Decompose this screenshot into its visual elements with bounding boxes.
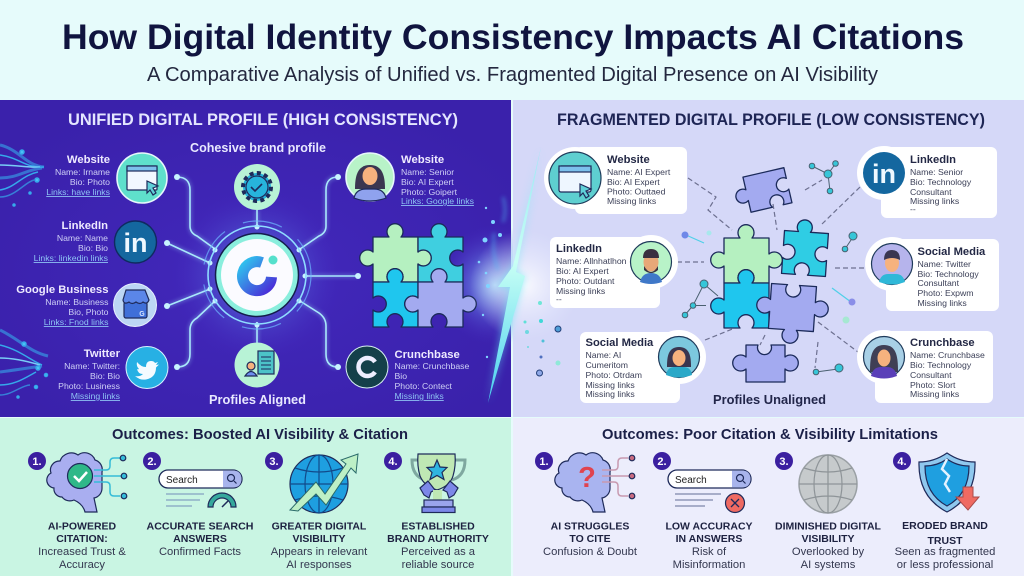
piece: bottom lavender: [733, 345, 798, 382]
card: linkedin right: Consultant: [910, 187, 952, 197]
heading: poor outcomes: Outcomes: Poor Citation & Visibility Limitations: [602, 426, 938, 443]
outcome 3: diminished: Overlooked by: [792, 546, 864, 558]
outcome 4: authority: BRAND AUTHORITY: [387, 533, 489, 545]
outcome 2: low accuracy: Risk of: [692, 546, 727, 558]
card: linkedin: [550, 235, 678, 308]
card: linkedin right: Name: Senior: [910, 167, 963, 177]
piece: top lavender: [732, 168, 792, 215]
outcome 3: visibility: VISIBILITY: [292, 533, 346, 545]
outcome 4: authority: ESTABLISHED: [401, 520, 475, 532]
profile: website: Name: Irname: [55, 167, 110, 177]
profile: person website: Website: [401, 154, 444, 166]
profile: person website: Links: Google links: [401, 196, 475, 206]
dashed links between cards and pieces: [677, 178, 870, 352]
outcome 4: eroded trust: or less professional: [897, 559, 993, 571]
label: profiles unaligned: Profiles Unaligned: [713, 393, 826, 407]
label: profiles aligned: Profiles Aligned: [209, 393, 306, 407]
connector lines to hub: [164, 174, 361, 370]
label: cohesive brand profile: Cohesive brand profile: [190, 141, 326, 155]
profile: linkedin: in: [124, 228, 148, 258]
outcome 1: citation: CITATION:: [56, 533, 108, 545]
icon: gear badge: [234, 164, 280, 210]
outcome 2: low accuracy: Misinformation: [673, 559, 745, 571]
card: crunchbase: Crunchbase: [910, 337, 975, 349]
assembled puzzle: [360, 224, 476, 327]
heading: unified: UNIFIED DIGITAL PROFILE (HIGH CONSISTENCY): [68, 110, 458, 129]
outcome 2: search: ACCURATE SEARCH: [146, 520, 254, 532]
outcome 3: diminished: VISIBILITY: [801, 533, 855, 545]
heading: fragmented: FRAGMENTED DIGITAL PROFILE (LOW CONSISTENCY): [557, 110, 985, 129]
card: linkedin right: --: [910, 204, 916, 214]
outcome 3: visibility: 3.: [269, 456, 279, 468]
outcome 1: citation: Increased Trust &: [38, 546, 126, 558]
profile: linkedin: LinkedIn: [62, 220, 108, 232]
card: website: Missing links: [607, 196, 657, 206]
lightning divider: [478, 147, 541, 403]
piece: cyan: [711, 270, 769, 328]
outcome 1: struggles: ?: [578, 462, 596, 494]
outcome 4: eroded trust: TRUST: [928, 535, 963, 547]
card: social media right: Name: Twitter: [918, 259, 971, 269]
outcome 4: eroded trust: [893, 452, 995, 571]
outcome 4: authority: 4.: [388, 456, 398, 468]
outcome 4: authority: Perceived as a: [401, 546, 476, 558]
profile: google business: [16, 284, 156, 327]
profile: linkedin: [34, 220, 156, 263]
card: social media right: [865, 237, 999, 311]
card: social media right: Missing links: [918, 298, 967, 308]
outcome 3: visibility: GREATER DIGITAL: [272, 520, 367, 532]
card: social media left: Social Media: [586, 337, 654, 349]
card: website: Photo: Outtaed: [607, 186, 666, 196]
outcome 1: citation: [28, 452, 127, 571]
card: linkedin: Bio: AI Expert: [556, 266, 609, 276]
scattered puzzle pieces: [711, 168, 830, 382]
outcome 1: struggles: [535, 452, 638, 558]
profile: twitter: Bio: Bio: [90, 371, 120, 381]
card: linkedin right: LinkedIn: [910, 154, 956, 166]
title: How Digital Identity Consistency Impacts AI Citations: [62, 18, 964, 57]
card: website: Bio: AI Expert: [607, 177, 660, 187]
outcome 4: eroded trust: Seen as fragmented: [895, 546, 995, 558]
profile: crunchbase: Missing links: [394, 391, 444, 401]
network nodes: [682, 161, 857, 375]
piece: lavender middle: [754, 283, 830, 346]
outcome 3: visibility: Appears in relevant: [271, 546, 368, 558]
panel: unified digital profile: [0, 100, 555, 417]
outcome 2: search: 2.: [147, 456, 157, 468]
card: social media right: Photo: Expwm: [918, 288, 974, 298]
outcome 2: low accuracy: Search: [675, 475, 707, 486]
panel: boosted outcomes: [0, 418, 511, 576]
outcome 3: diminished: [775, 452, 882, 571]
outcome 3: diminished: DIMINISHED DIGITAL: [775, 520, 882, 532]
profile: crunchbase: Crunchbase: [394, 349, 460, 361]
profile: person website: Name: Senior: [401, 167, 454, 177]
panel: fragmented digital profile: [470, 100, 1024, 417]
outcome 2: search: Search: [166, 475, 198, 486]
outcome 4: authority: reliable source: [402, 559, 474, 571]
outcome 1: citation: AI-POWERED: [48, 520, 117, 532]
outcome 3: visibility: [265, 452, 368, 571]
outcome 3: visibility: AI responses: [286, 559, 352, 571]
card: crunchbase: Name: Crunchbase: [910, 350, 985, 360]
outcome 3: diminished: 3.: [779, 456, 789, 468]
profile: crunchbase: Name: Crunchbase: [394, 361, 470, 371]
profile: google business: G: [139, 311, 145, 318]
subtitle: A Comparative Analysis of Unified vs. Fragmented Digital Presence on AI Visibility: [147, 64, 878, 86]
card: crunchbase: Missing links: [910, 389, 960, 399]
outcome 4: eroded trust: ERODED BRAND: [902, 520, 988, 532]
panel: poor outcomes: [513, 418, 1024, 576]
profile: person website: Photo: Goipert: [401, 187, 458, 197]
profile: twitter: Missing links: [71, 391, 121, 401]
card: linkedin: --: [556, 294, 562, 304]
outcome 2: low accuracy: IN ANSWERS: [676, 533, 742, 545]
outcome 2: search: ANSWERS: [173, 533, 227, 545]
card: linkedin: LinkedIn: [556, 243, 602, 255]
profile: twitter: Twitter: [84, 348, 121, 360]
card: social media right: Social Media: [918, 246, 986, 258]
card: social media left: Missing links: [586, 380, 635, 390]
outcome 2: low accuracy: [653, 452, 753, 571]
card: crunchbase: Consultant: [910, 370, 952, 380]
profile: google business: Google Business: [16, 284, 108, 296]
card: social media left: [580, 330, 706, 403]
header band: [0, 0, 1024, 100]
card: social media left: Photo: Otrdam: [586, 370, 642, 380]
profile: person website: [346, 153, 475, 206]
card: social media right: Consultant: [918, 278, 960, 288]
outcome 4: authority: [384, 452, 489, 571]
outcome 1: citation: 1.: [32, 456, 42, 468]
data streams bottom-left: [0, 330, 48, 398]
card: website: [544, 147, 687, 214]
card: linkedin: Name: Allnhatlhon: [556, 256, 627, 266]
card: crunchbase: [857, 330, 993, 403]
profile: linkedin: Bio: Bio: [78, 243, 108, 253]
card: social media left: Name: AI: [586, 350, 621, 360]
profile: crunchbase: Bio: [394, 371, 407, 381]
profile: linkedin: Links: linkedin links: [34, 253, 109, 263]
card: social media right: Bio: Technology: [918, 269, 979, 279]
profile: linkedin: Name: Name: [57, 233, 108, 243]
profile: website: [46, 153, 167, 203]
profile: person website: Bio: AI Expert: [401, 177, 454, 187]
profile: twitter: [58, 346, 168, 401]
piece: green: [711, 225, 782, 283]
card: linkedin right: [857, 146, 997, 218]
outcome 2: low accuracy: 2.: [657, 456, 667, 468]
profile: twitter: Photo: Lusiness: [58, 381, 121, 391]
profile: website: Website: [67, 154, 110, 166]
card: social media left: Missing links: [586, 389, 635, 399]
profile: crunchbase: [346, 346, 470, 401]
outcome 2: low accuracy: LOW ACCURACY: [665, 520, 753, 532]
icon: aligned profiles: [234, 342, 280, 388]
card: linkedin: Missing links: [556, 286, 606, 296]
card: website: Name: AI Expert: [607, 167, 671, 177]
outcome 1: struggles: Confusion & Doubt: [543, 546, 638, 558]
profile: google business: Links: Fnod links: [44, 317, 109, 327]
outcome 1: struggles: AI STRUGGLES: [551, 520, 629, 532]
card: linkedin right: in: [872, 159, 896, 189]
card: website: Website: [607, 154, 650, 166]
outcome 1: citation: Accuracy: [59, 559, 105, 571]
profile: google business: Bio, Photo: [68, 307, 109, 317]
profile: google business: Name: Business: [45, 297, 109, 307]
card: linkedin: Photo: Outdant: [556, 276, 615, 286]
sparks: [522, 230, 856, 382]
data streams top-left: [0, 145, 44, 206]
outcome 2: search: [143, 452, 254, 558]
outcome 4: eroded trust: 4.: [897, 456, 907, 468]
outcome 2: search: Confirmed Facts: [159, 546, 241, 558]
piece: teal rotated: [782, 219, 829, 276]
card: crunchbase: Photo: Slort: [910, 380, 956, 390]
outcome 1: struggles: TO CITE: [569, 533, 611, 545]
card: social media left: Cumeritom: [586, 360, 628, 370]
central hub logo: [203, 221, 311, 329]
heading: boosted outcomes: Outcomes: Boosted AI Visibility & Citation: [112, 426, 408, 443]
outcome 1: struggles: 1.: [539, 456, 549, 468]
outcome 3: diminished: AI systems: [801, 559, 856, 571]
card: linkedin right: Missing links: [910, 196, 960, 206]
card: crunchbase: Bio: Technology: [910, 360, 972, 370]
profile: crunchbase: Photo: Contect: [394, 381, 453, 391]
profile: website: Links: have links: [46, 187, 111, 197]
profile: twitter: Name: Twitter:: [64, 361, 120, 371]
profile: website: Bio: Photo: [70, 177, 110, 187]
card: linkedin right: Bio: Technology: [910, 177, 972, 187]
